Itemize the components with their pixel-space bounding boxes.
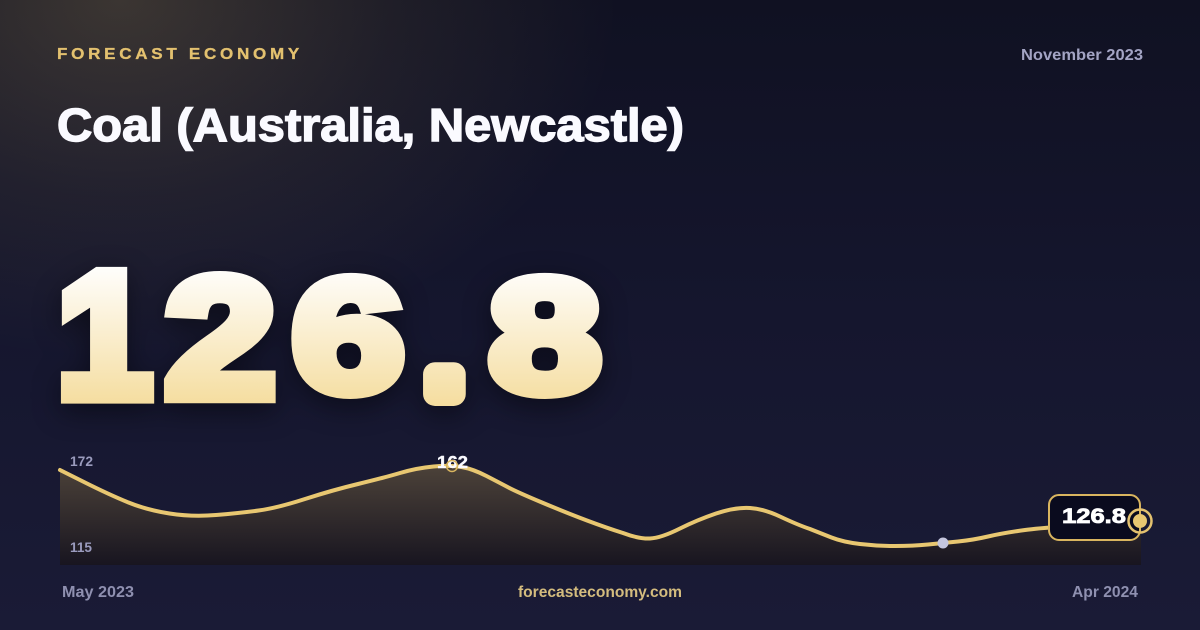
chart area fill	[60, 466, 1141, 565]
headline value	[57, 235, 601, 434]
current marker	[1128, 510, 1152, 532]
start date: May 2023	[62, 584, 134, 601]
headline value: .	[426, 275, 463, 423]
line	[60, 466, 1141, 546]
current value callout	[1049, 495, 1140, 540]
axis max label: 172	[70, 454, 93, 469]
date: November 2023	[1021, 47, 1143, 64]
title: Coal (Australia, Newcastle)	[57, 99, 684, 151]
peak marker	[446, 460, 458, 472]
headline value: 1	[57, 235, 152, 434]
headline value: 8	[489, 247, 601, 425]
current value callout: 126.8	[1062, 505, 1126, 528]
brand label: FORECAST ECONOMY	[57, 46, 303, 63]
headline value: 2	[165, 243, 276, 433]
low marker	[938, 538, 948, 548]
end date: Apr 2024	[1072, 584, 1138, 601]
chart: price line	[60, 466, 1141, 565]
axis min label: 115	[70, 540, 92, 555]
headline value: 6	[292, 246, 404, 425]
site url: forecasteconomy.com	[518, 584, 682, 601]
peak label: 162	[437, 452, 468, 472]
